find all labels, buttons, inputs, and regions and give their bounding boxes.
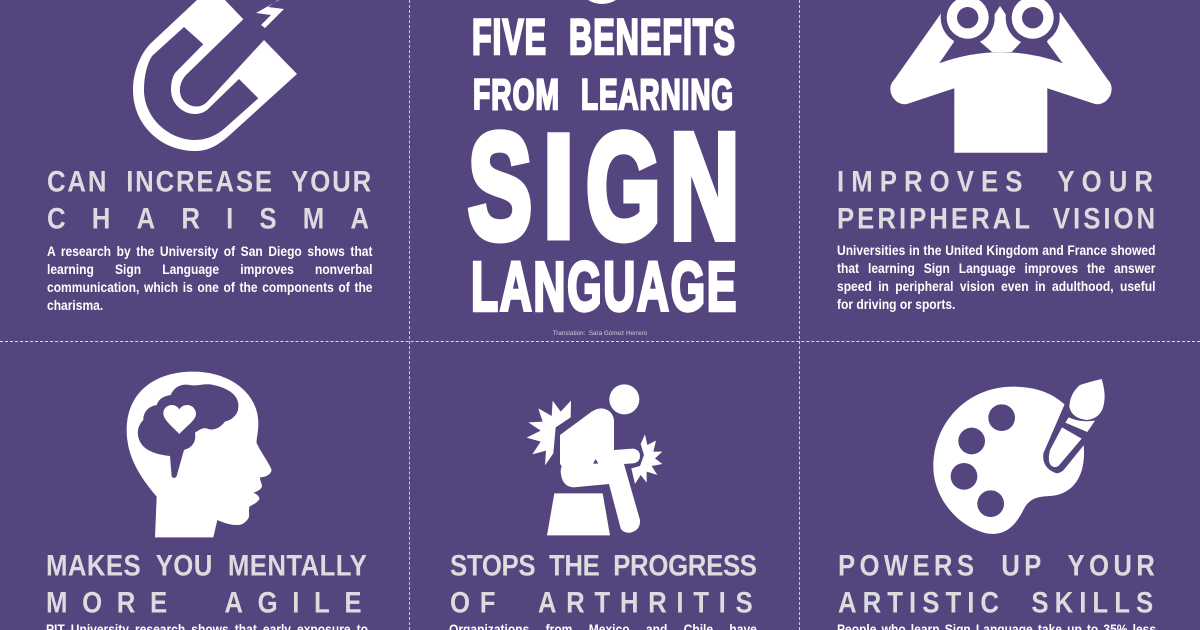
heading: stops the progress of arthritis: OF ARTHRITIS: [450, 586, 753, 619]
heading: improves your peripheral vision: [837, 165, 1155, 235]
heading: makes you mentally more agile: [46, 549, 367, 619]
heading: powers up your artistic skills: [838, 549, 1155, 619]
icon: knee pain burst: [631, 434, 662, 484]
panel: mentally agile: [46, 372, 368, 630]
text: peripheral vision description: speed in peripheral vision even in adulthood, useful: [837, 278, 1155, 294]
icon: spark: [256, 0, 284, 28]
text: charisma description: [47, 243, 373, 313]
icon: magnet: [133, 0, 297, 151]
icon: back pain burst: [527, 401, 571, 465]
icon: brush: [1043, 379, 1105, 473]
heading: can increase your charisma: CAN INCREASE YOUR: [47, 165, 371, 198]
text: charisma description: A research by the University of San Diego shows that: [47, 243, 373, 259]
heading: can increase your charisma: [47, 165, 371, 235]
panel: artistic skills: [837, 379, 1156, 630]
text: charisma description: charisma.: [47, 297, 103, 313]
heading: makes you mentally more agile: MAKES YOU MENTALLY: [46, 549, 367, 582]
title: [468, 10, 739, 320]
title: S: [468, 102, 532, 270]
credit: translation: Translation: Sara Gómez Herrero: [553, 330, 647, 337]
panel: arthritis: [449, 384, 757, 630]
title: FROM: [473, 71, 560, 119]
heading: improves your peripheral vision: IMPROVES YOUR: [837, 165, 1153, 198]
icon: palette and brush: [933, 379, 1105, 534]
icon: stool: [547, 493, 610, 535]
text: charisma description: learning Sign Language improves nonverbal: [47, 261, 373, 277]
heading: powers up your artistic skills: ARTISTIC SKILLS: [838, 586, 1153, 619]
text: charisma description: communication, which is one of the components of the: [47, 279, 373, 295]
text: peripheral vision description: for driving or sports.: [837, 296, 955, 312]
text: peripheral vision description: Universities in the United Kingdom and France showed: [837, 242, 1155, 258]
heading: stops the progress of arthritis: [450, 549, 757, 619]
panel: peripheral vision: [837, 0, 1156, 312]
title: FIVE: [472, 10, 547, 65]
heading: can increase your charisma: CHARISMA: [47, 202, 369, 235]
title: G: [586, 102, 661, 270]
heading: powers up your artistic skills: POWERS UP YOUR: [838, 549, 1155, 582]
icon: person with joint pain: [526, 384, 662, 536]
icon: person with binoculars: [890, 0, 1112, 153]
text: peripheral vision description: [837, 242, 1156, 312]
icon: partial circle at top: [588, 0, 616, 4]
panel: title: [468, 0, 739, 337]
icon: head with brain and heart: [126, 372, 272, 538]
text: peripheral vision description: that learning Sign Language improves the answer: [837, 260, 1155, 276]
heading: improves your peripheral vision: PERIPHERAL VISION: [837, 202, 1155, 235]
title: N: [670, 102, 739, 270]
title: I: [541, 104, 576, 270]
heading: stops the progress of arthritis: STOPS THE PROGRESS: [450, 549, 757, 582]
panel: charisma: [47, 0, 373, 313]
heading: makes you mentally more agile: MORE AGILE: [46, 586, 362, 619]
icon: heart: [163, 405, 196, 434]
